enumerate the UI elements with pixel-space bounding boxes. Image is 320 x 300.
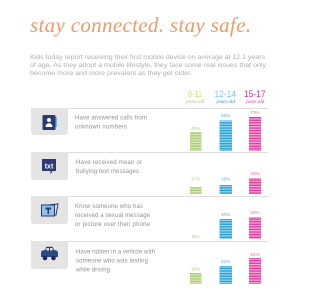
row 1 label: unknown numbers — [75, 124, 127, 130]
row 3 label: received a sexual message — [75, 213, 151, 219]
age header: 12-14: 12-14 — [214, 89, 236, 99]
icon card: car — [31, 241, 68, 269]
row 4 bars — [190, 252, 261, 284]
row 1 bars: 68% — [221, 113, 230, 118]
row 3 bars: 50% — [250, 210, 260, 215]
row 3 bars — [192, 210, 261, 239]
row 2 label: bullying text messages — [76, 169, 139, 175]
intro text — [30, 54, 267, 77]
intro text: Kids today report receiving their first mobile device on average at 12.1 years — [30, 54, 265, 61]
intro text: of age. As they adopt a mobile lifestyle, they face some real issues that only — [30, 62, 267, 69]
age header: 12-14: years old — [215, 100, 235, 105]
row 1 label: Have answered calls from — [75, 116, 147, 122]
age header: 15-17: 15-17 — [244, 89, 266, 99]
row 2 label: Have received mean or — [76, 160, 142, 166]
age header: 12-14 — [214, 89, 236, 105]
row 2 bars: 25% — [250, 171, 260, 176]
row 4 label: while driving — [75, 268, 110, 274]
age header: 8-11: years old — [185, 100, 205, 105]
row 4 label: Have ridden in a vehicle with — [76, 250, 155, 256]
icon card: address book — [31, 108, 68, 135]
row 1 bars: 42% — [191, 126, 200, 131]
row 1 bars: 70% — [250, 110, 260, 115]
row 4 bars: 15% — [191, 266, 200, 272]
row 4 bars: 42% — [221, 259, 230, 264]
row 3: sexual message — [31, 196, 268, 239]
row 4: riding with texting driver — [31, 241, 268, 284]
row 3 bars: 40% — [221, 212, 230, 217]
row 1 bars — [190, 110, 261, 151]
title: stay connected. stay safe. — [30, 13, 251, 37]
row 4 bars: 64% — [250, 252, 260, 257]
row 3 bars: N/A — [192, 234, 199, 239]
row 4 label: someone who was texting — [76, 258, 148, 264]
row 2 bars: 18% — [221, 176, 230, 182]
icon card: photos — [31, 196, 68, 224]
icon card: text bubble: txt — [45, 164, 54, 170]
row 2 bars: 17% — [191, 176, 200, 182]
row 3 label: Know someone who has — [75, 204, 143, 210]
row 2: mean text messages — [31, 152, 268, 194]
intro text: become more and more prevalent as they get older. — [30, 70, 192, 77]
row 1: answered calls — [31, 108, 268, 151]
age header: 8-11: 8-11 — [188, 89, 202, 99]
icon card: text bubble — [31, 152, 68, 180]
age header: 15-17: years old — [245, 100, 265, 105]
age header: 15-17 — [244, 89, 266, 105]
row 2 bars — [190, 171, 261, 194]
row 3 label: or picture over their phone — [75, 222, 151, 228]
age header: 8-11 — [185, 89, 205, 105]
